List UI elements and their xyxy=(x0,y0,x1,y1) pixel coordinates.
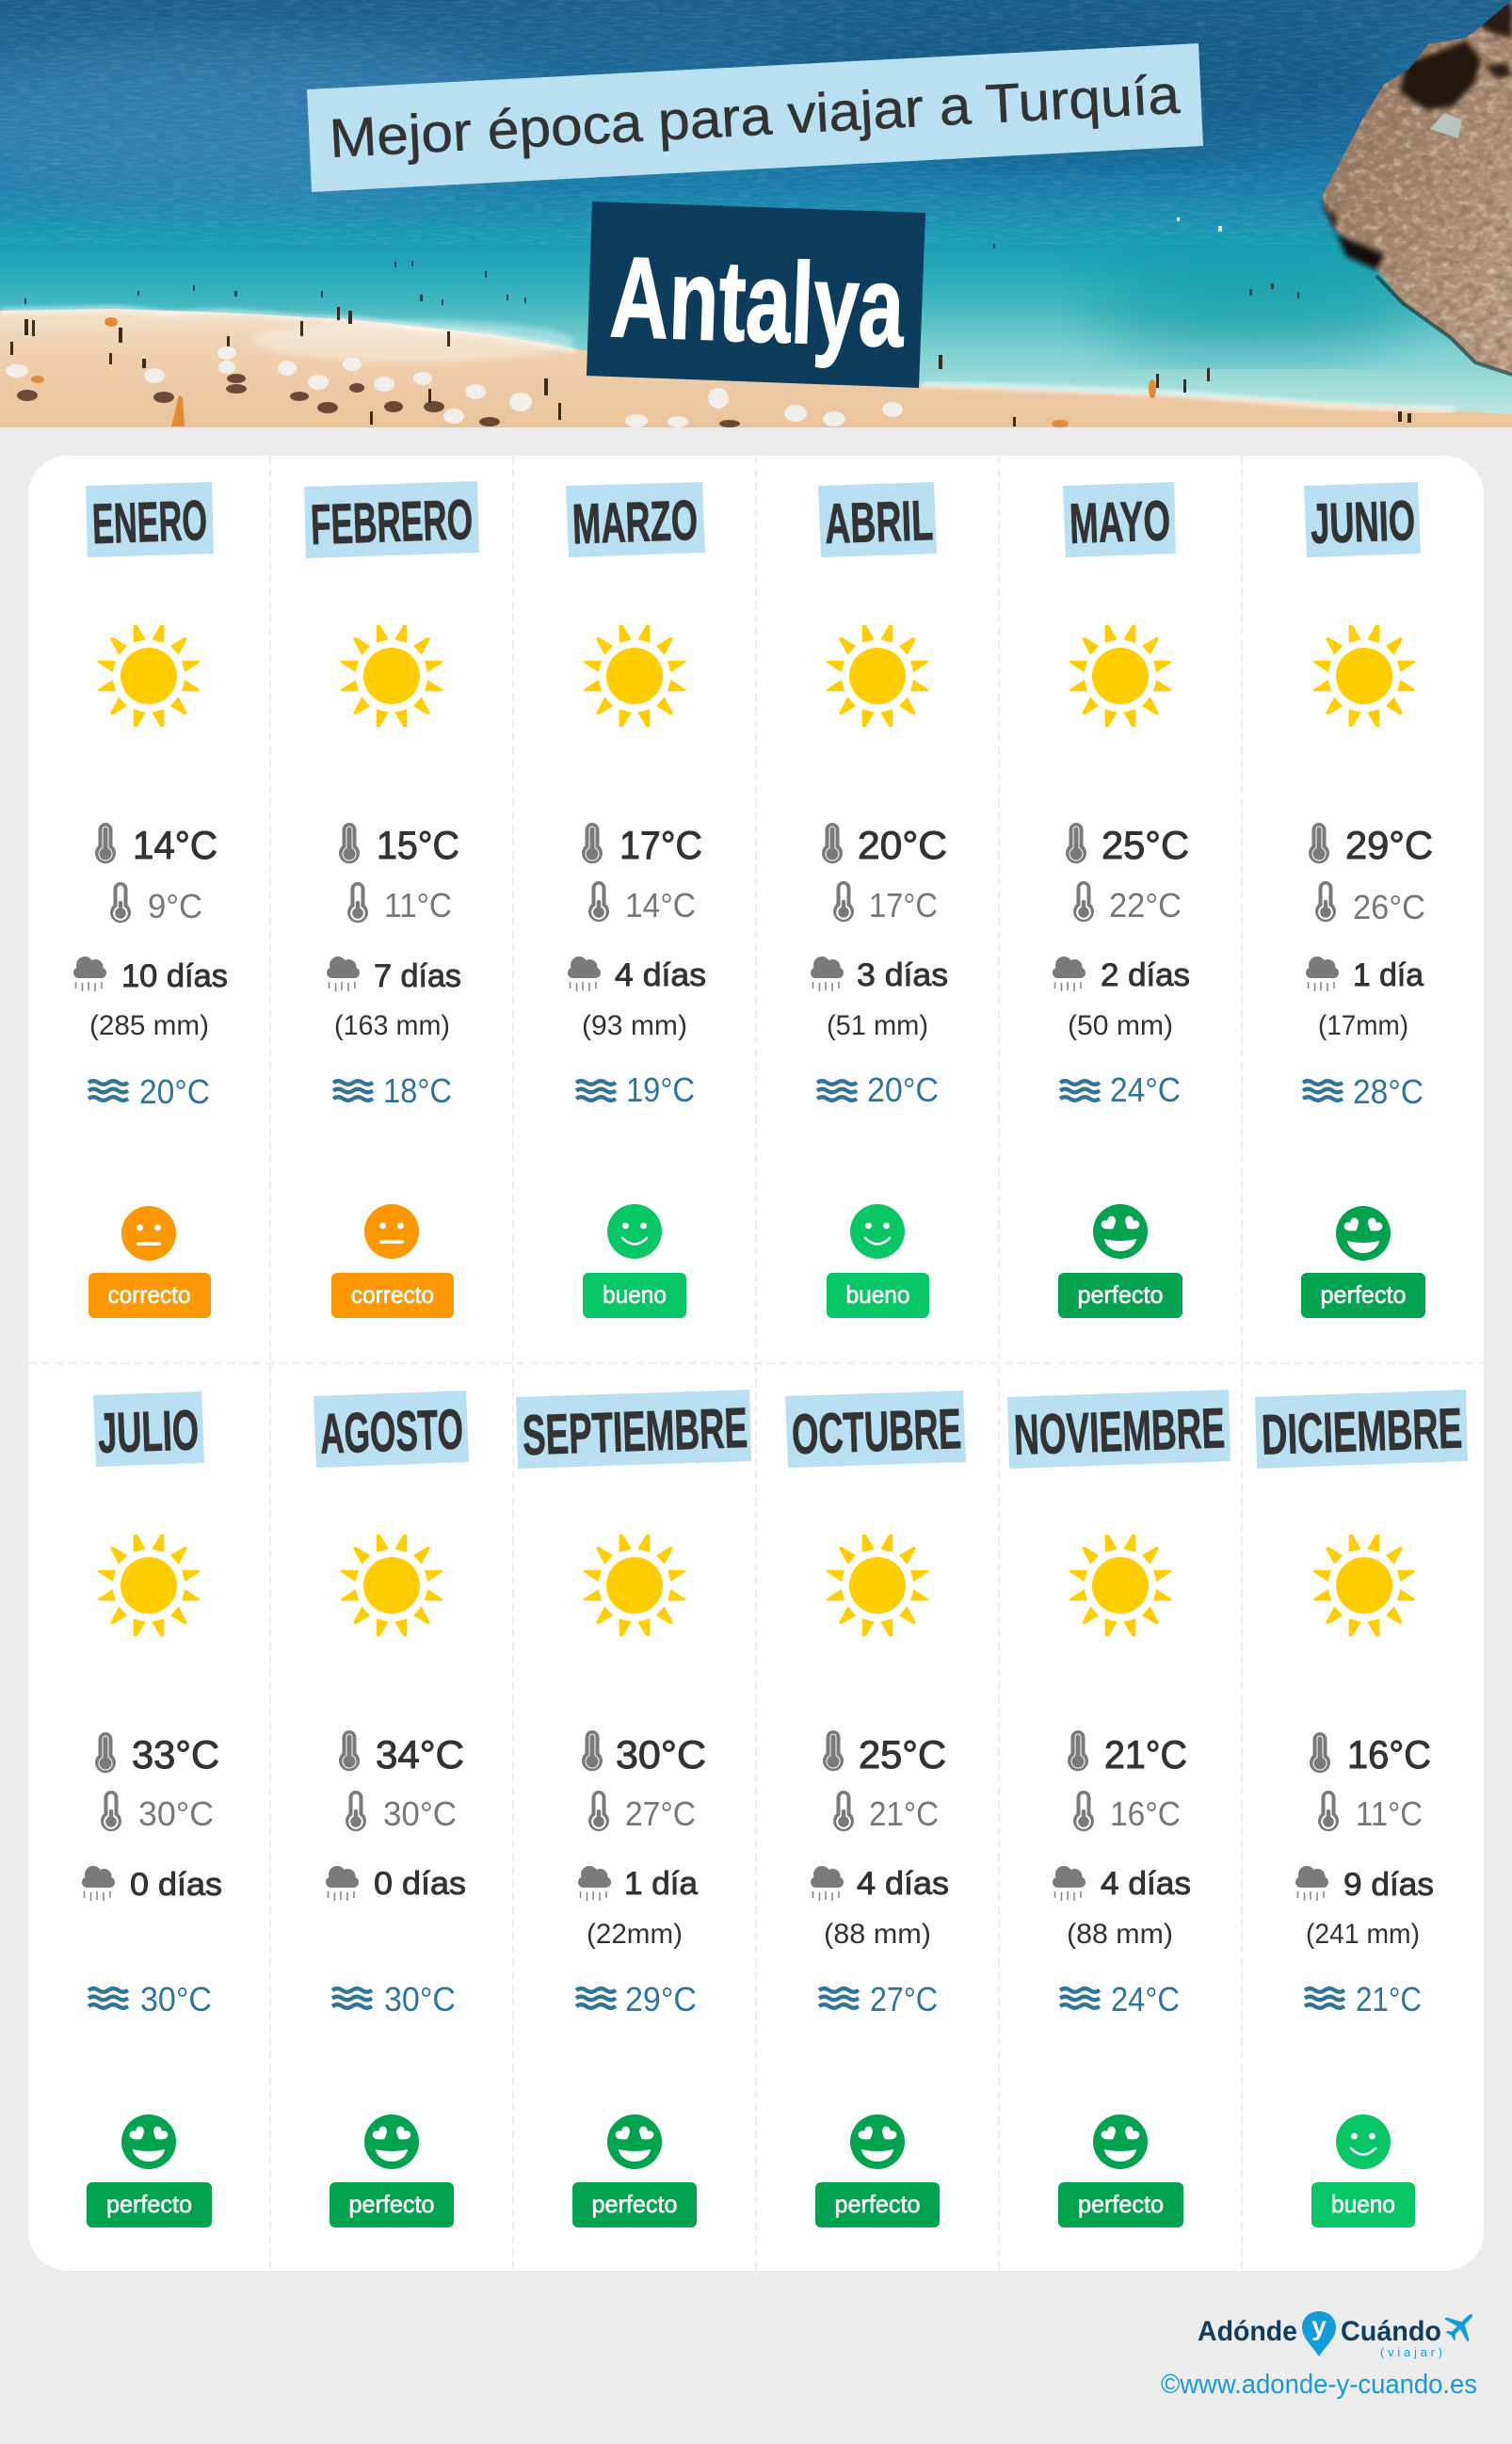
max temperature: 34°C xyxy=(376,1732,464,1777)
month heading: ABRIL xyxy=(824,489,934,555)
panel: agosto xyxy=(314,1391,469,2227)
rain days: 4 días xyxy=(857,1866,949,1902)
title banner xyxy=(307,43,1203,192)
icon: sun xyxy=(1312,1535,1416,1636)
panel: marzo xyxy=(566,482,706,1318)
rain days xyxy=(326,1866,466,1902)
icon: map pin with y: y xyxy=(1311,2311,1327,2340)
month heading: SEPTIEMBRE xyxy=(522,1396,748,1467)
rating: perfecto: perfecto xyxy=(834,2190,921,2218)
min temperature xyxy=(1318,1791,1423,1833)
panel: junio xyxy=(1301,482,1433,1318)
rainfall: (93 mm) xyxy=(582,1010,687,1041)
month heading xyxy=(304,481,479,558)
max temperature: 16°C xyxy=(1347,1732,1431,1777)
max temperature xyxy=(1068,1730,1187,1777)
footer url: ©www.adonde-y-cuando.es xyxy=(1161,2370,1477,2400)
max temperature: 15°C xyxy=(377,823,459,867)
rainfall: (285 mm) xyxy=(89,1010,209,1041)
icon: sun xyxy=(826,1535,929,1636)
rain days: 1 día xyxy=(1353,957,1424,993)
max temperature: 30°C xyxy=(616,1732,706,1777)
min temperature: 30°C xyxy=(138,1794,214,1833)
min temperature xyxy=(833,1791,939,1833)
logo word: viajar: (viajar) xyxy=(1380,2345,1442,2359)
rating: perfecto xyxy=(572,2114,697,2227)
month heading: FEBRERO xyxy=(310,488,474,556)
sea temperature xyxy=(576,1070,695,1109)
hero photo: beach and sea xyxy=(0,0,1512,427)
rain days: 10 días xyxy=(121,958,228,994)
sea temperature: 27°C xyxy=(870,1980,938,2018)
min temperature: 11°C xyxy=(384,886,452,925)
min temperature xyxy=(101,1791,214,1833)
max temperature: 25°C xyxy=(1102,823,1189,867)
rain days xyxy=(73,957,228,994)
sea temperature: 20°C xyxy=(139,1072,210,1111)
sea temperature xyxy=(1060,1980,1180,2018)
max temperature xyxy=(339,1730,464,1777)
rain days xyxy=(578,1866,698,1902)
month heading: OCTUBRE xyxy=(791,1397,962,1466)
sea temperature: 30°C xyxy=(384,1980,456,2018)
panel: enero xyxy=(73,482,228,1318)
sea temperature: 24°C xyxy=(1110,1070,1181,1109)
max temperature: 25°C xyxy=(859,1732,946,1777)
rainfall: (241 mm) xyxy=(1306,1919,1420,1950)
sea temperature xyxy=(1305,1980,1422,2018)
sea temperature: 29°C xyxy=(625,1980,697,2018)
rating: perfecto: perfecto xyxy=(348,2190,435,2218)
rain days xyxy=(1295,1866,1434,1903)
min temperature: 9°C xyxy=(148,887,202,925)
rain days xyxy=(1053,957,1190,993)
month heading: JULIO xyxy=(97,1398,200,1465)
max temperature: 17°C xyxy=(619,823,702,867)
logo word: Cuándo: Cuándo xyxy=(1341,2316,1441,2347)
min temperature: 26°C xyxy=(1353,888,1425,926)
rain days: 9 días xyxy=(1343,1867,1434,1903)
month heading xyxy=(785,1391,966,1468)
sea temperature xyxy=(817,1070,939,1109)
icon: sun xyxy=(340,1535,443,1636)
month heading: ENERO xyxy=(91,489,208,555)
month heading: JUNIO xyxy=(1310,489,1416,555)
rating: perfecto xyxy=(1058,2114,1183,2227)
month heading xyxy=(516,1390,751,1469)
rating: perfecto: perfecto xyxy=(1078,2190,1164,2218)
min temperature xyxy=(1073,881,1182,925)
panel: septiembre xyxy=(516,1390,751,2227)
rain days xyxy=(568,957,706,993)
logo word: Adónde: Adónde xyxy=(1198,2316,1297,2347)
icon: sun xyxy=(1312,625,1416,727)
rainfall: (88 mm) xyxy=(1067,1919,1173,1950)
icon: sun xyxy=(1069,625,1172,727)
min temperature: 11°C xyxy=(1356,1794,1423,1833)
rating: bueno xyxy=(583,1204,686,1318)
icon: sun xyxy=(583,1535,686,1636)
sea temperature: 24°C xyxy=(1111,1980,1180,2018)
month heading xyxy=(818,482,937,557)
sea temperature: 20°C xyxy=(867,1070,939,1109)
max temperature xyxy=(95,823,217,867)
min temperature: 27°C xyxy=(625,1794,696,1833)
month heading xyxy=(1007,1390,1231,1469)
city label: Antalya: Antalya xyxy=(608,233,907,371)
rating: correcto: correcto xyxy=(107,1280,190,1309)
min temperature xyxy=(347,882,452,925)
icon: sun xyxy=(1069,1535,1172,1636)
rating: perfecto xyxy=(1301,1206,1425,1318)
rain days: 1 día xyxy=(624,1866,698,1902)
title banner: Mejor época para viajar a Turquía xyxy=(328,64,1182,169)
sea temperature: 21°C xyxy=(1356,1980,1422,2018)
rating: bueno xyxy=(1311,2114,1415,2227)
rating: bueno xyxy=(827,1204,929,1318)
sea temperature: 28°C xyxy=(1353,1072,1424,1111)
month heading xyxy=(1063,482,1176,557)
rating: perfecto: perfecto xyxy=(1077,1280,1164,1309)
rain days: 2 días xyxy=(1101,957,1190,993)
sea temperature xyxy=(1303,1072,1424,1111)
max temperature: 14°C xyxy=(133,823,217,867)
sea temperature: 18°C xyxy=(383,1071,452,1110)
rock cliff xyxy=(1318,0,1512,377)
sea temperature xyxy=(576,1980,697,2018)
min temperature: 21°C xyxy=(869,1794,939,1833)
rain days: 0 días xyxy=(130,1867,222,1903)
min temperature xyxy=(833,881,938,925)
rain days xyxy=(1053,1866,1191,1902)
rainfall: (22mm) xyxy=(587,1919,683,1950)
panel: octubre xyxy=(785,1391,966,2227)
beach sand xyxy=(0,308,1512,427)
max temperature xyxy=(1310,1732,1431,1777)
max temperature: 33°C xyxy=(132,1732,219,1777)
footer logo xyxy=(1198,2303,1484,2359)
min temperature: 16°C xyxy=(1110,1794,1181,1833)
min temperature xyxy=(1315,881,1425,926)
month heading: NOVIEMBRE xyxy=(1013,1396,1226,1467)
sea temperature xyxy=(1060,1070,1181,1109)
rainfall: (88 mm) xyxy=(824,1919,931,1950)
rain days xyxy=(811,1866,949,1902)
icon: sun xyxy=(583,625,686,727)
rating: bueno: bueno xyxy=(1331,2190,1395,2218)
max temperature xyxy=(582,823,702,867)
month heading: MAYO xyxy=(1069,489,1171,555)
icon: map pin with y xyxy=(1302,2311,1336,2356)
month heading xyxy=(314,1391,469,1468)
min temperature: 22°C xyxy=(1109,886,1182,925)
rating: bueno: bueno xyxy=(845,1280,909,1309)
max temperature xyxy=(823,1730,946,1777)
icon: sun xyxy=(826,625,929,727)
max temperature: 29°C xyxy=(1345,823,1433,867)
rating: correcto xyxy=(88,1206,211,1318)
month heading xyxy=(566,482,705,557)
rating: perfecto: perfecto xyxy=(591,2190,678,2218)
sea temperature: 30°C xyxy=(140,1980,212,2018)
sea temperature xyxy=(332,1980,456,2018)
rain days: 3 días xyxy=(857,957,948,993)
rating: perfecto xyxy=(87,2114,212,2227)
rainfall: (51 mm) xyxy=(827,1010,928,1041)
rain days: 7 días xyxy=(374,958,461,994)
sea temperature xyxy=(819,1980,938,2018)
rainfall: (163 mm) xyxy=(334,1010,450,1041)
sea temperature xyxy=(333,1071,452,1110)
max temperature: 21°C xyxy=(1104,1732,1187,1777)
min temperature: 30°C xyxy=(383,1794,457,1833)
min temperature: 14°C xyxy=(625,886,696,925)
beach umbrellas and sunbathers xyxy=(6,217,1411,427)
month heading xyxy=(93,1391,204,1467)
panel: noviembre xyxy=(1007,1390,1231,2227)
rating: perfecto xyxy=(1058,1204,1182,1318)
rain days: 0 días xyxy=(374,1866,466,1902)
rating: correcto xyxy=(331,1204,454,1318)
min temperature xyxy=(588,881,696,925)
max temperature xyxy=(582,1730,706,1777)
panel: diciembre xyxy=(1255,1390,1468,2227)
rating: bueno: bueno xyxy=(603,1280,667,1309)
rainfall: (17mm) xyxy=(1318,1010,1408,1041)
sea xyxy=(0,0,1512,427)
rain days xyxy=(82,1866,222,1903)
rain days xyxy=(1306,957,1424,993)
month heading xyxy=(86,482,214,557)
rating: perfecto xyxy=(330,2114,454,2227)
icon: sun xyxy=(97,625,201,727)
min temperature xyxy=(346,1791,457,1833)
sea temperature xyxy=(88,1072,210,1111)
rain days xyxy=(327,957,461,994)
rain days: 4 días xyxy=(1101,1866,1191,1902)
panel: febrero xyxy=(304,481,479,1318)
month heading: MARZO xyxy=(571,489,699,555)
month heading xyxy=(1304,482,1421,557)
sea temperature: 19°C xyxy=(626,1070,695,1109)
min temperature xyxy=(1073,1791,1181,1833)
min temperature: 17°C xyxy=(869,886,938,925)
rating: perfecto: perfecto xyxy=(106,2190,192,2218)
max temperature xyxy=(339,823,459,867)
calendar card xyxy=(28,456,1484,2271)
panel: mayo xyxy=(1053,482,1190,1318)
icon: sun xyxy=(340,625,443,727)
rating: correcto: correcto xyxy=(351,1280,434,1309)
rating: perfecto xyxy=(815,2114,940,2227)
max temperature: 20°C xyxy=(858,823,947,867)
panel: abril xyxy=(811,482,948,1318)
panel: julio xyxy=(82,1391,222,2227)
rainfall: (50 mm) xyxy=(1068,1010,1173,1041)
icon: plane xyxy=(1439,2303,1484,2348)
rain days xyxy=(811,957,948,993)
min temperature xyxy=(588,1791,696,1833)
city label: Antalya xyxy=(587,201,925,388)
min temperature xyxy=(110,882,202,925)
icon: sun xyxy=(97,1535,201,1636)
rain days: 4 días xyxy=(615,957,706,993)
month heading: AGOSTO xyxy=(319,1397,464,1466)
rating: perfecto: perfecto xyxy=(1320,1280,1407,1309)
sea temperature xyxy=(88,1980,212,2018)
